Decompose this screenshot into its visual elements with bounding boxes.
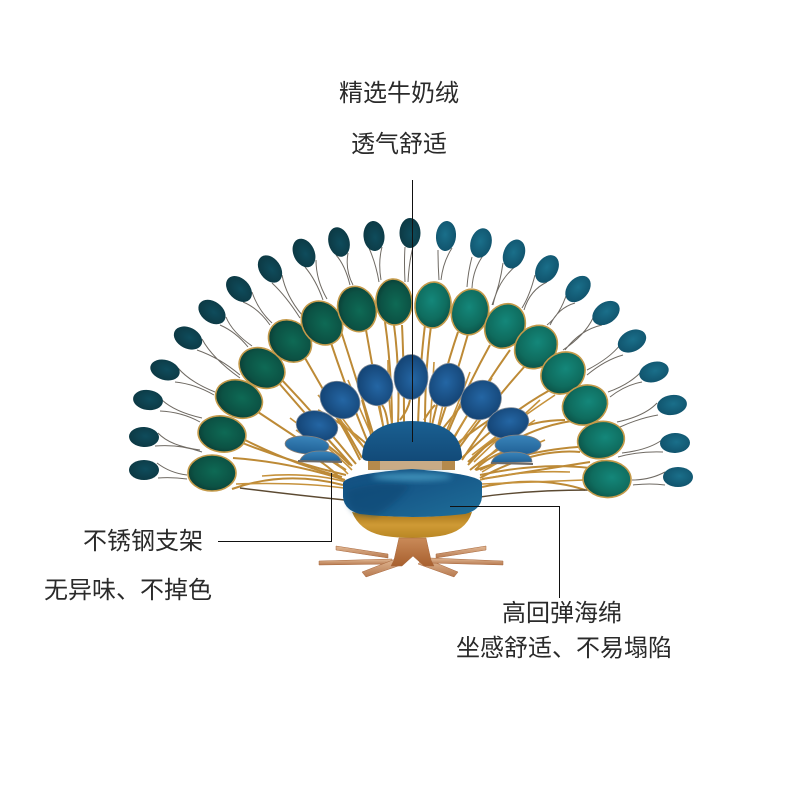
armrest cushions <box>284 434 541 464</box>
text: breathable: 透气舒适 <box>351 131 447 158</box>
callout line: stainless frame <box>218 473 332 542</box>
backrest cushion <box>362 421 462 461</box>
label: stainless steel frame: 不锈钢支架 <box>83 528 203 555</box>
thin wire stems <box>155 247 665 485</box>
outer teal feather ovals <box>128 218 693 487</box>
heading: velvet material: 精选牛奶绒 <box>339 80 459 107</box>
callout line: sponge <box>450 506 560 598</box>
dense gold stems near hub <box>236 360 584 488</box>
label: high resilience sponge: 高回弹海绵 <box>502 600 622 627</box>
blue velvet seat <box>343 469 482 517</box>
text: comfortable seat: 坐感舒适、不易塌陷 <box>456 635 672 662</box>
inner blue feather ovals <box>293 354 532 445</box>
dark lower wires <box>240 488 590 500</box>
callout line: velvet <box>412 180 414 442</box>
green feather ovals <box>188 278 632 499</box>
backrest support strip <box>368 460 455 470</box>
rose gold base <box>319 538 503 577</box>
text: no odor, no fading: 无异味、不掉色 <box>44 577 212 604</box>
gold stems <box>232 322 590 490</box>
gold bowl <box>352 512 472 538</box>
